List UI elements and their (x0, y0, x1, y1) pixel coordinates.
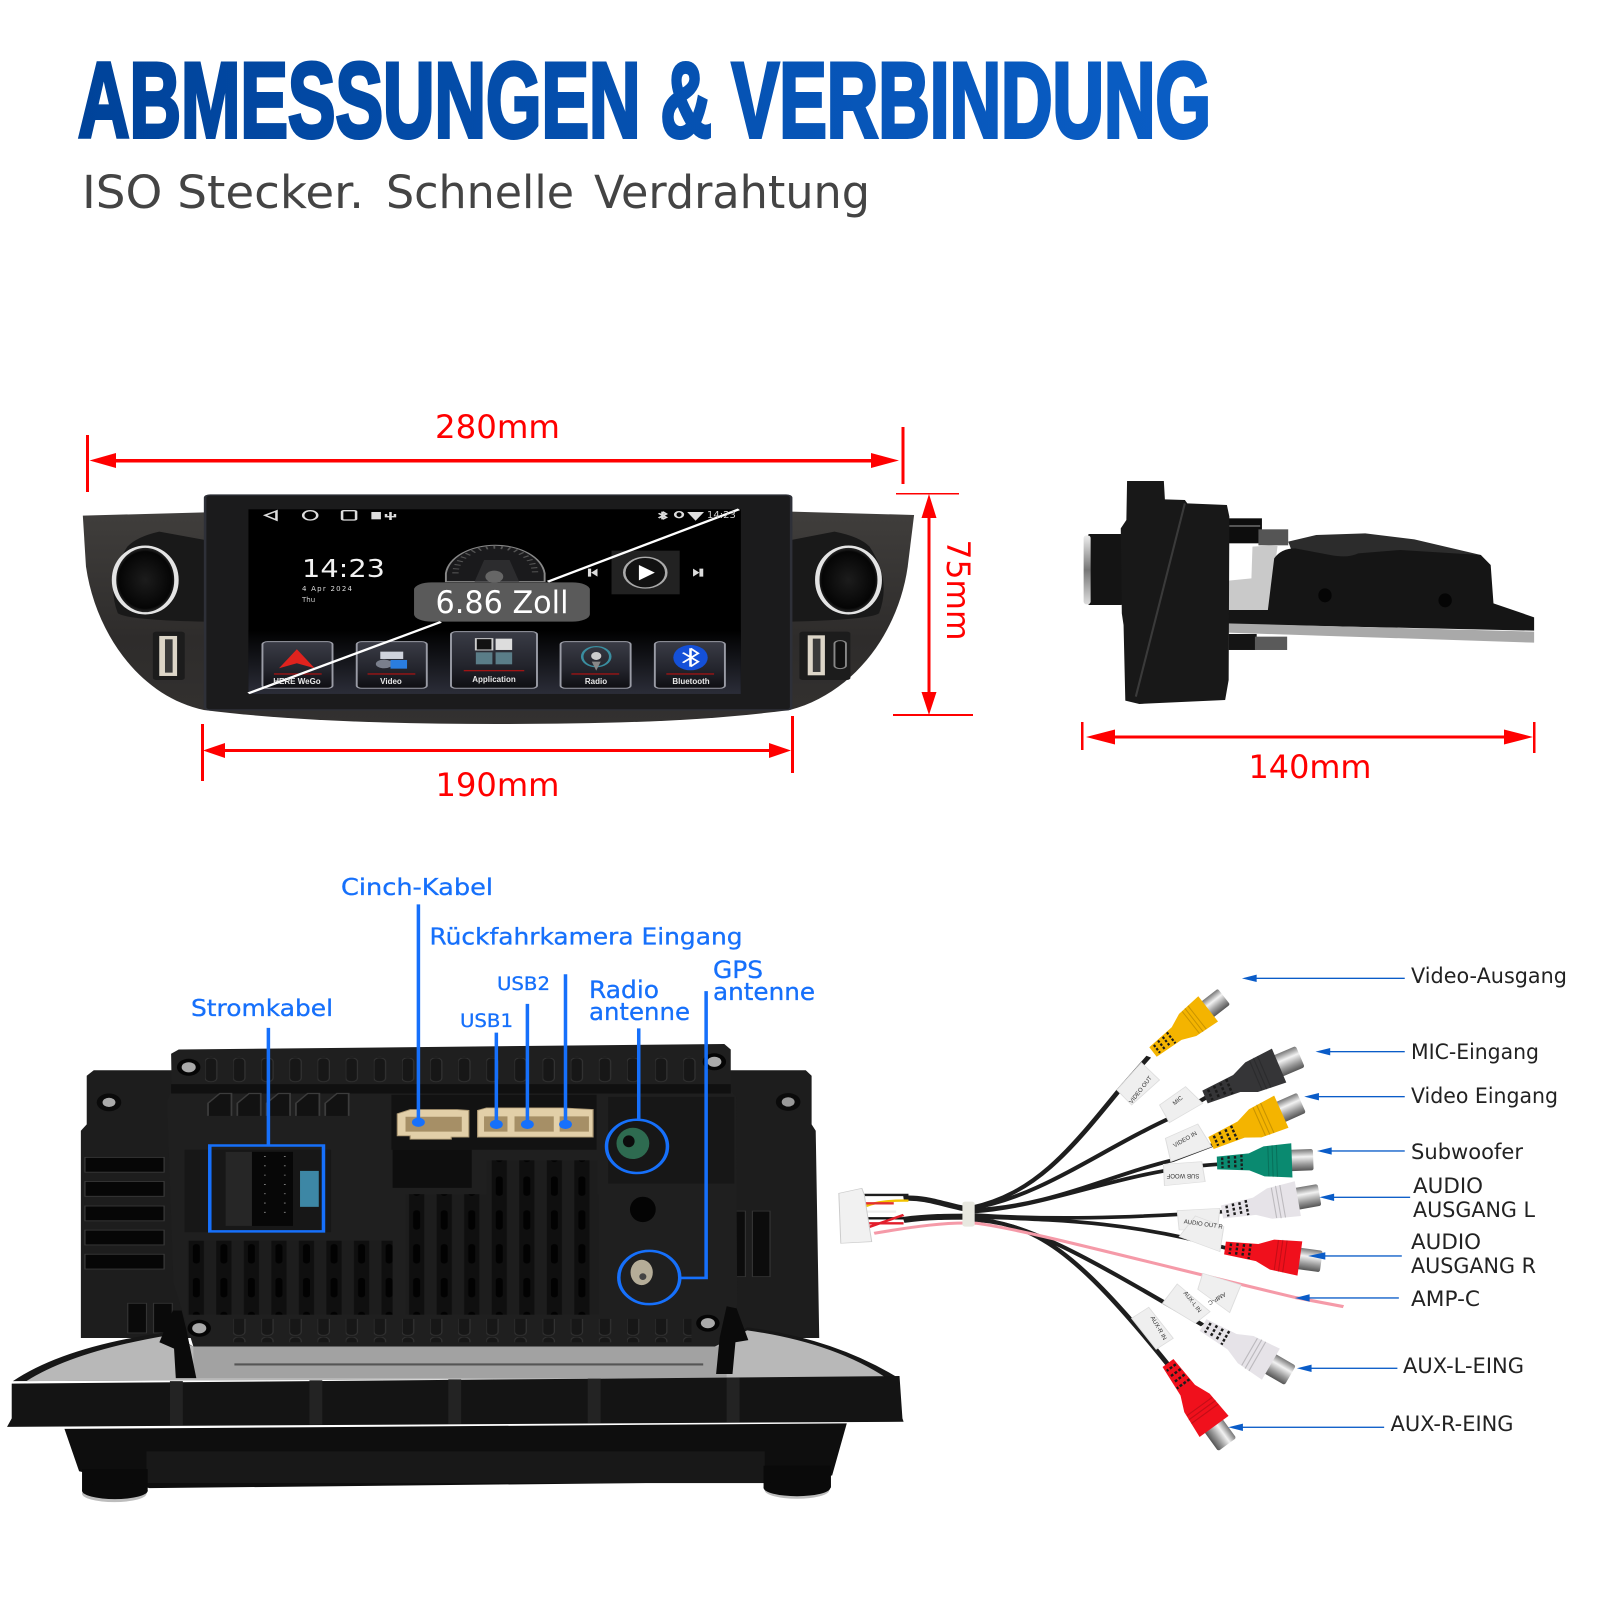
next icon (693, 569, 703, 577)
connector: AUX-R red (1154, 1352, 1242, 1455)
diagonal highlight upper (548, 509, 739, 582)
panel: side view of radio (1084, 481, 1534, 704)
screw holes (1318, 588, 1452, 607)
connector dots (412, 1118, 572, 1129)
lower clip (1229, 634, 1287, 650)
light tray side (1229, 545, 1278, 611)
right USB port (808, 635, 825, 675)
cable tag texts: VIDEO IN (1173, 1131, 1198, 1149)
gps antenna socket (631, 1260, 653, 1285)
bezel seams (170, 1378, 740, 1426)
top ledge shade (171, 1084, 731, 1093)
cable wires (904, 1057, 1227, 1365)
red tile lines (274, 670, 714, 675)
tile labels: HERE WeGo (273, 677, 321, 686)
panel: RCA cable harness (839, 1057, 1343, 1365)
dimension: 280mm: 280mm (435, 408, 560, 446)
dimension: 280mm (86, 408, 904, 492)
cable tag texts: VIDEO OUT (1129, 1075, 1154, 1105)
label: Audio Ausgang R: AUDIO (1411, 1230, 1481, 1254)
chassis (1227, 548, 1534, 631)
screen date: 4 Apr 2024 (302, 585, 353, 593)
cable tag texts (1129, 1075, 1226, 1341)
label: Radio antenne: Radio (589, 976, 659, 1004)
tray groove (234, 1363, 703, 1365)
left vent strips (85, 1157, 164, 1269)
silver screen edge (1227, 623, 1534, 643)
icon: bluetooth (673, 645, 708, 670)
gray tray (13, 1327, 897, 1381)
previous icon (588, 569, 598, 577)
gps line and ring (619, 991, 706, 1304)
label: AUX-R-EING: AUX-R-EING (1390, 1412, 1514, 1436)
label: AUX-L-EING: AUX-L-EING (1403, 1354, 1524, 1378)
top parts (1288, 533, 1488, 567)
side screw left (97, 1093, 121, 1111)
right foot (764, 1466, 831, 1499)
label: USB1: USB1 (460, 1010, 513, 1032)
icon row background (248, 630, 741, 694)
play button (624, 557, 666, 588)
blue callout lines and markers (210, 904, 706, 1304)
tray shelf (193, 1346, 727, 1378)
media tile (612, 551, 680, 594)
connector recess (391, 1095, 597, 1150)
icon: radio (582, 647, 610, 671)
pink wire (874, 1223, 1343, 1307)
icon: application grid (476, 639, 512, 664)
app tiles (262, 632, 725, 688)
label: Stromkabel: Stromkabel (191, 996, 333, 1022)
label: Radio antenne (589, 976, 690, 1026)
right brackets (732, 1211, 770, 1277)
label: GPS antenne: GPS (713, 956, 763, 984)
rear housing (81, 1070, 819, 1338)
left control pad (113, 532, 205, 622)
panel: front view of radio (83, 495, 914, 724)
bezel lower (64, 1423, 847, 1488)
dimension: 75mm (893, 493, 977, 716)
main back plate (167, 1044, 737, 1346)
label: USB2: USB2 (497, 973, 550, 995)
icon: video (376, 652, 407, 669)
tile labels: Radio (585, 677, 607, 686)
connector: video in yellow (1204, 1087, 1309, 1159)
cable tag texts: MIC (1172, 1095, 1185, 1107)
tile labels: Bluetooth (672, 677, 710, 686)
cinch connector (397, 1110, 469, 1139)
cable tag texts: AUX-L IN (1182, 1291, 1202, 1314)
right control pad (791, 532, 884, 622)
left USB port (159, 636, 177, 676)
subtitle: Schnelle (386, 166, 574, 219)
faceplate (1121, 481, 1229, 704)
dimension: 140mm (1081, 722, 1536, 786)
camera line (562, 974, 568, 1124)
tile labels (273, 675, 710, 686)
cinch line (415, 904, 421, 1122)
blue arrows (1228, 975, 1410, 1431)
embossed shapes (208, 1093, 349, 1116)
left latch (159, 1310, 196, 1378)
cable tag texts: AMP-C (1206, 1290, 1226, 1306)
cinch recess (393, 1150, 472, 1188)
USB-C port (834, 641, 846, 669)
left foot (82, 1469, 148, 1502)
dimension: 75mm: 75mm (939, 540, 977, 640)
diagonal highlight lower (248, 622, 441, 693)
radio line and ring (607, 1028, 667, 1173)
label: AMP-C: AMP-C (1411, 1287, 1480, 1311)
knob stem (1088, 534, 1123, 605)
upper vent block (486, 1160, 598, 1196)
subtitle: Verdrahtung (594, 166, 870, 219)
bezel (205, 495, 791, 710)
label: Audio Ausgang R: AUSGANG R (1411, 1254, 1536, 1278)
label: Cinch-Kabel: Cinch-Kabel (341, 875, 493, 901)
antenna block (608, 1097, 734, 1184)
white multi-pin connector (839, 1188, 872, 1243)
USB and camera connectors (478, 1108, 593, 1137)
upper bracket (1229, 518, 1288, 545)
tile labels: Application (472, 675, 516, 684)
connector: AUX-L white (1194, 1309, 1299, 1391)
cable tie (962, 1202, 975, 1227)
connector: mic black (1198, 1040, 1307, 1114)
subtitle (82, 166, 870, 219)
chrome knob ring (1084, 535, 1091, 604)
bezel inner bar (146, 1451, 765, 1483)
size pill (414, 582, 590, 622)
plate screws (177, 1053, 726, 1337)
connector: video out yellow (1143, 984, 1234, 1065)
panel: rear view of radio (7, 904, 904, 1502)
speedometer gauge (446, 545, 545, 583)
left USB pad (153, 632, 185, 680)
screen clock: 14:23 (302, 554, 385, 583)
label: GPS antenne: antenne (713, 978, 815, 1006)
faceplate edge (1136, 503, 1185, 697)
screen weekday: Thu (301, 596, 315, 604)
lower vent block (188, 1241, 393, 1315)
usb2 line (524, 1004, 530, 1124)
radio antenna socket (616, 1128, 649, 1159)
bottom slots (223, 1319, 691, 1342)
top slots (202, 1057, 700, 1083)
status bar icons (265, 511, 702, 520)
label: MIC-Eingang: MIC-Eingang (1411, 1040, 1539, 1064)
usb1 line (493, 1033, 499, 1124)
tile labels: Video (380, 677, 402, 686)
power socket recess (185, 1150, 331, 1232)
cable tag texts: AUDIO OUT R (1183, 1219, 1224, 1231)
side screw right (776, 1093, 800, 1111)
dimension: 190mm: 190mm (436, 766, 560, 804)
right knob (817, 547, 880, 613)
gray tray surface (26, 1330, 886, 1381)
pill text: 6.86 Zoll (436, 585, 568, 621)
dimension: 190mm (201, 716, 794, 804)
right USB pad (799, 632, 850, 680)
connector: audio R red (1223, 1231, 1324, 1279)
colored connector wires (864, 1195, 908, 1228)
power connector (226, 1152, 319, 1226)
front bezel (7, 1376, 904, 1427)
subtitle: ISO Stecker. (82, 166, 364, 219)
screen (248, 509, 741, 694)
cable tag texts: AUX-R IN (1149, 1316, 1167, 1341)
cable tags (1117, 1063, 1241, 1349)
label: Radio antenne: antenne (589, 998, 690, 1026)
grommet hole (630, 1197, 656, 1222)
label: Audio Ausgang L: AUSGANG L (1413, 1198, 1535, 1222)
stromkabel box (210, 1028, 323, 1231)
label: GPS antenne (713, 956, 815, 1006)
label: Audio Ausgang L: AUDIO (1413, 1174, 1483, 1198)
label: Audio Ausgang L (1413, 1174, 1535, 1222)
icon: navigation arrow (279, 649, 315, 668)
label: Video Eingang: Video Eingang (1411, 1084, 1558, 1108)
status time: 14:23 (707, 510, 736, 521)
lower-left housing slots (128, 1303, 172, 1333)
left knob (114, 547, 176, 613)
right latch (716, 1306, 748, 1374)
cable tag texts: SUB WOOF (1166, 1172, 1199, 1178)
middle vent block (406, 1194, 599, 1315)
connector: audio L white (1219, 1177, 1323, 1229)
label: Video-Ausgang: Video-Ausgang (1411, 964, 1567, 988)
connector: subwoofer green (1216, 1143, 1314, 1180)
dimension: 140mm: 140mm (1248, 748, 1372, 786)
label: Rückfahrkamera Eingang: Rückfahrkamera Eingang (430, 924, 742, 950)
label: Audio Ausgang R (1411, 1230, 1536, 1278)
label: Subwoofer: Subwoofer (1411, 1140, 1523, 1164)
device body (83, 512, 914, 724)
